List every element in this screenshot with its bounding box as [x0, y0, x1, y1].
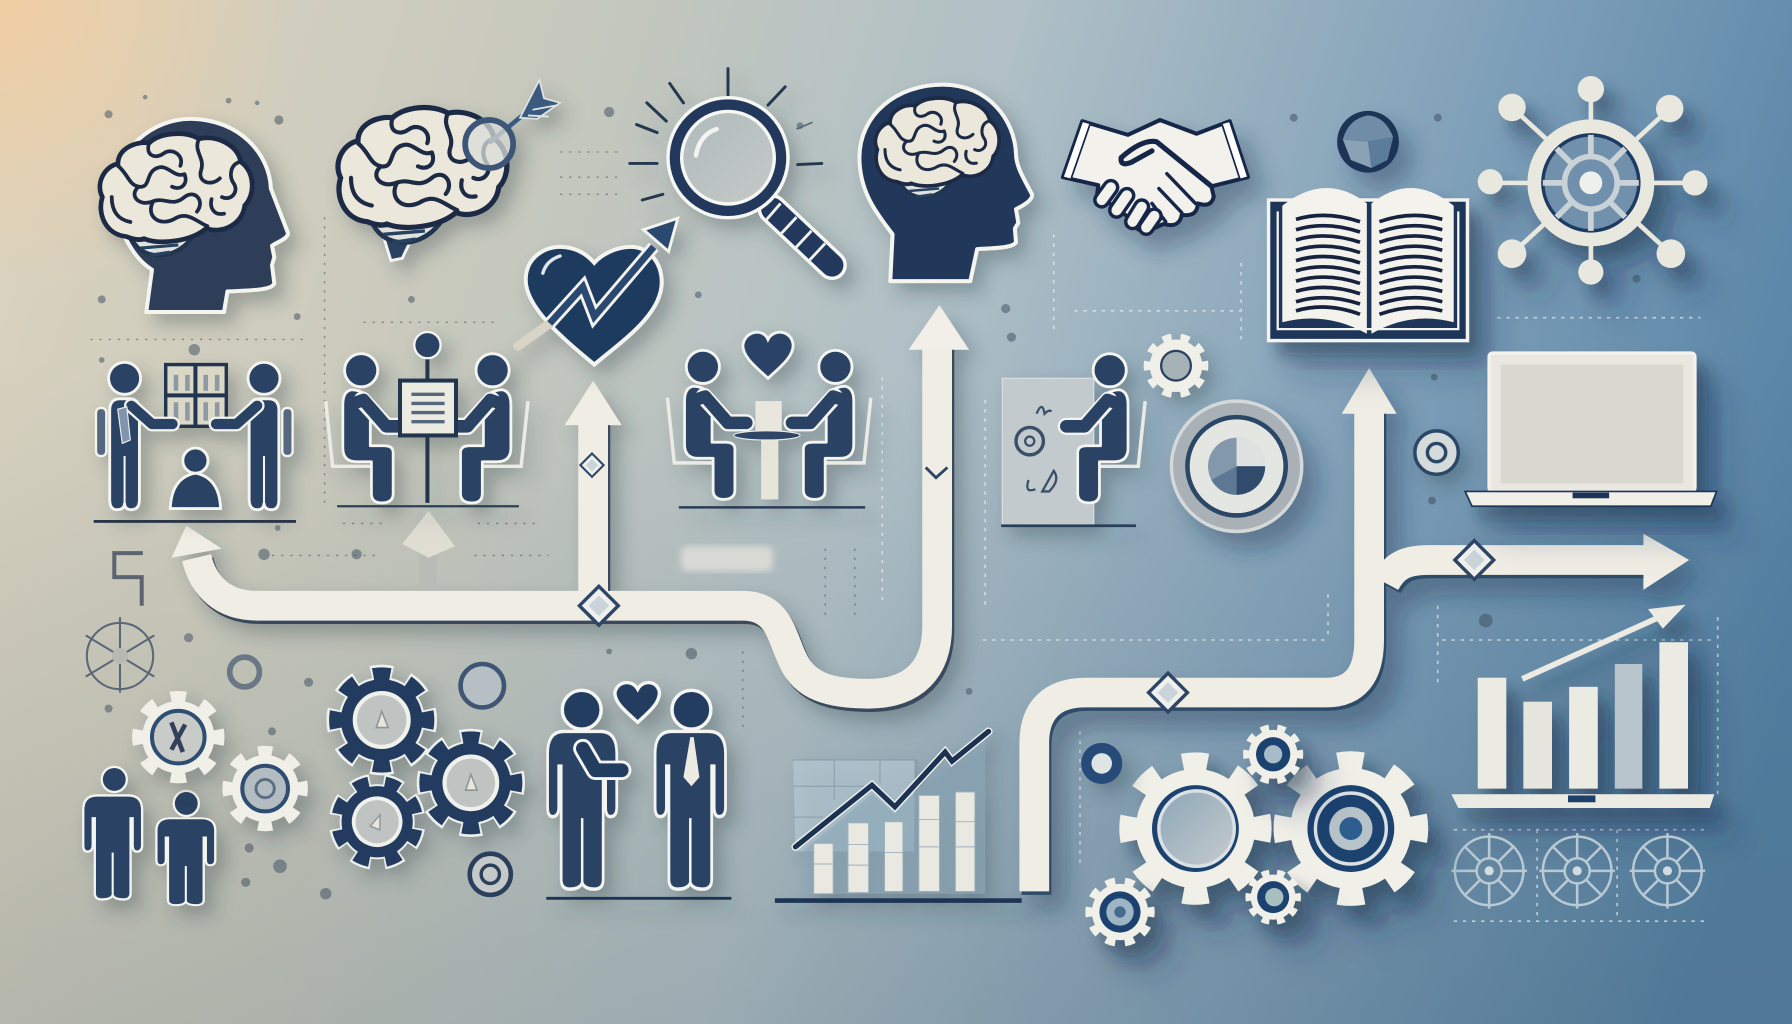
icon: small badge beside gears: [1081, 743, 1122, 784]
icon: handshake: [1063, 120, 1248, 231]
icon: small badge: [1415, 431, 1458, 474]
icon: heart with rising arrow: [518, 218, 678, 365]
small faint arrow: [402, 511, 455, 590]
icon: head with brain, left: [100, 119, 288, 312]
icon: round dial: [1171, 401, 1302, 531]
mini bar chart: centre: [775, 731, 1022, 901]
path node markers: [579, 453, 947, 625]
icon: laptop: [1465, 353, 1717, 506]
icons: three outlined wheels: [1451, 833, 1705, 909]
sketched hook glyph: [114, 553, 143, 606]
icon: book: [1269, 188, 1467, 341]
icon: ship wheel with satellite nodes: [1478, 76, 1707, 285]
flow arrow: left route rising to the top centre: [171, 305, 969, 697]
people: seated figure with note board: [1001, 354, 1145, 526]
icon: large gear left: [1129, 762, 1262, 895]
icon: magnifying glass with rays: [630, 69, 832, 265]
people: two standing figures presenting a board: [96, 362, 293, 510]
blurred path fragment: [681, 546, 773, 571]
people: two standing figures with heart and tie: [546, 683, 731, 898]
icon: cluster of three navy gears: [323, 673, 517, 875]
bar chart: right with rising arrow: [1451, 605, 1714, 808]
icon: thin compass wheel: [86, 617, 154, 693]
icon: head with brain, centre: [859, 85, 1032, 281]
icons: ring badges: [230, 657, 511, 895]
people: seated pair at table with heart: [667, 332, 871, 507]
icons: small gears around large gears: [1090, 728, 1299, 942]
faint dotted guide lines and specks: [90, 95, 1718, 921]
flow arrow: right route rising and branching: [1034, 368, 1689, 895]
icon: pair of cream gears: [138, 697, 302, 826]
icon: large gear right: [1283, 761, 1418, 896]
icon: small cog near dial: [1148, 338, 1204, 394]
right path node diamonds: [1149, 541, 1494, 712]
people: two small standing figures: [83, 767, 215, 905]
floor line: [94, 520, 296, 523]
icon: small faceted dial: [1337, 111, 1399, 173]
people: seated pair with document: [326, 332, 528, 506]
icon: brain with target arrow: [338, 80, 560, 261]
